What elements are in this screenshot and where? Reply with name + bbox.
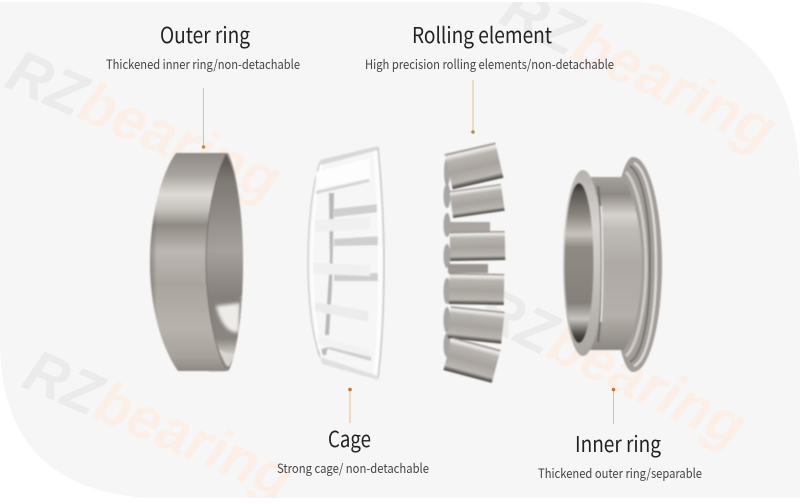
label: cage — [277, 422, 429, 477]
roller: back lower — [448, 264, 488, 273]
label: outer ring: Outer ring — [160, 18, 251, 50]
inner ring bearing part — [563, 157, 662, 372]
rims — [308, 162, 320, 357]
label: outer ring — [106, 18, 300, 73]
back flange — [612, 157, 662, 372]
roller: back upper — [448, 222, 490, 234]
label: inner ring: Thickened outer ring/separable — [538, 463, 702, 482]
front struts — [313, 158, 370, 357]
back struts — [319, 175, 382, 361]
roller 1 — [445, 143, 503, 189]
watermark: bottom right: RZbearing — [468, 273, 757, 460]
leader: cage — [348, 388, 352, 423]
cage part — [308, 146, 384, 380]
outer ring bearing part — [150, 153, 243, 371]
rolling elements part — [443, 143, 505, 383]
leader: outer ring — [202, 88, 205, 149]
highlight: interior reflection — [214, 296, 243, 367]
front rim — [563, 170, 603, 356]
watermark: top left: RZbearing — [0, 36, 290, 214]
label: inner ring: Inner ring — [575, 427, 662, 459]
roller 6 — [443, 337, 501, 383]
label: outer ring: Thickened inner ring/non-detachable — [106, 54, 300, 73]
roller 2 — [449, 184, 505, 218]
roller 3 — [450, 231, 505, 261]
roller ends — [444, 158, 450, 357]
label: cage: Cage — [328, 422, 371, 454]
body — [582, 177, 642, 350]
bore — [564, 183, 594, 343]
label: rolling element: High precision rolling elements/non-detachable — [365, 54, 614, 73]
leader: inner ring — [612, 388, 615, 424]
leader: rolling element — [471, 80, 475, 134]
roller 5 — [447, 306, 505, 344]
label: cage: Strong cage/ non-detachable — [277, 458, 429, 477]
label: rolling element: Rolling element — [412, 18, 552, 50]
roller 4 — [449, 273, 504, 305]
label: inner ring — [538, 427, 702, 482]
groove ridge — [626, 172, 646, 356]
label: rolling element — [365, 18, 614, 73]
